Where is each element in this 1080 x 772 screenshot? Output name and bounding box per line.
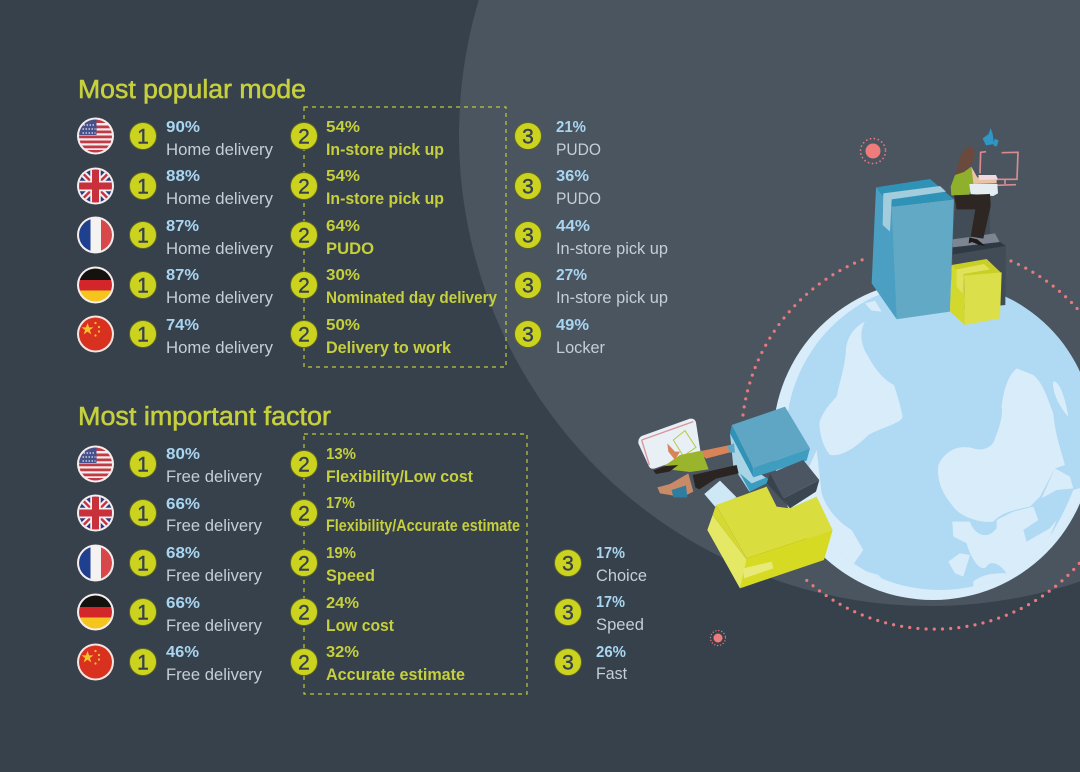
row: Germany: 17% — [596, 594, 625, 611]
row: UK — [77, 494, 520, 535]
row: Germany: 1 — [137, 274, 149, 298]
row: UK: 2 — [298, 502, 310, 526]
row: UK: 66% — [166, 496, 200, 513]
table: most important factor — [77, 446, 647, 684]
row: Germany: 2 — [298, 602, 310, 624]
dark stand box — [953, 200, 1006, 310]
row: UK: 17% — [326, 495, 355, 512]
icon: red location dot, upper — [860, 138, 886, 164]
row: USA: 2 — [298, 454, 310, 476]
row: Germany: 3 — [562, 602, 574, 624]
row: USA — [77, 446, 473, 486]
row: USA: 2 — [298, 126, 310, 148]
row: China: 2 — [298, 324, 310, 346]
row: USA: Home delivery — [166, 140, 273, 159]
row: USA: 1 — [137, 126, 149, 148]
row: Germany: Nominated day delivery — [326, 289, 498, 307]
row: China: 1 — [137, 324, 149, 346]
row: France: 64% — [326, 218, 360, 235]
row: Germany: 27% — [556, 267, 587, 284]
row: Germany: 1 — [137, 602, 149, 624]
light blue box — [704, 481, 737, 507]
trousers — [693, 465, 739, 489]
monitor — [980, 152, 1018, 185]
row: UK: PUDO — [556, 189, 601, 208]
row: Germany: 30% — [326, 267, 360, 284]
lower arm — [657, 473, 693, 497]
row: USA: Free delivery — [166, 467, 262, 486]
row: UK: In-store pick up — [326, 190, 444, 208]
row: Germany: Low cost — [326, 617, 394, 635]
row: Germany: 2 — [298, 274, 310, 298]
row: China: 1 — [137, 652, 149, 674]
row: UK: 2 — [298, 176, 310, 198]
row: UK: 1 — [137, 176, 149, 198]
row: China: 2 — [298, 652, 310, 674]
row: UK: 3 — [522, 176, 534, 198]
illustration: person lying with phone — [638, 419, 739, 497]
row: USA: 54% — [326, 119, 360, 136]
row: China: Fast — [596, 664, 627, 683]
row: UK — [77, 168, 601, 208]
row: France: 2 — [298, 224, 310, 248]
row: USA — [77, 118, 601, 159]
row: Germany: Free delivery — [166, 616, 262, 635]
row: UK: 54% — [326, 168, 360, 185]
shoes — [969, 237, 985, 246]
row: UK: Home delivery — [166, 189, 273, 208]
row: France: 3 — [522, 224, 534, 248]
hair — [653, 465, 678, 474]
row: France: 87% — [166, 218, 199, 235]
icon: red location dot, lower — [710, 630, 726, 646]
row: China: 3 — [522, 324, 534, 346]
torso — [663, 451, 709, 472]
row: UK: 1 — [137, 502, 149, 526]
row: France — [77, 544, 647, 585]
upper leg — [698, 445, 731, 459]
row: Germany: 3 — [522, 274, 534, 298]
row: USA: 80% — [166, 446, 200, 463]
row: France: 3 — [562, 552, 574, 576]
row: France: 44% — [556, 218, 590, 235]
row: France: In-store pick up — [556, 239, 668, 258]
dark small box — [767, 460, 819, 508]
row: USA: 13% — [326, 446, 356, 463]
row: France: Speed — [326, 567, 375, 585]
row: France: Home delivery — [166, 239, 273, 258]
row: France: 17% — [596, 545, 625, 562]
row: USA: 1 — [137, 454, 149, 476]
row: Germany — [77, 266, 668, 307]
laptop — [969, 184, 998, 196]
row: France — [77, 216, 668, 258]
blue box — [730, 407, 810, 492]
row: China: 32% — [326, 644, 359, 661]
row: China — [77, 316, 605, 357]
large background circle — [459, 0, 1080, 606]
heading: most popular mode: Most popular mode — [78, 76, 306, 104]
trousers — [954, 194, 991, 239]
phone — [638, 419, 701, 469]
torso — [951, 167, 973, 195]
row: China: Delivery to work — [326, 339, 452, 357]
dotted orbit around the globe — [743, 258, 1080, 629]
illustration: woman at a computer with thumbs-up icon — [951, 128, 1018, 246]
row: China: Free delivery — [166, 665, 262, 684]
dashed highlight box: most popular mode — [304, 107, 506, 367]
row: USA: 3 — [522, 126, 534, 148]
row: France: 19% — [326, 545, 356, 562]
row: USA: Flexibility/Low cost — [326, 468, 473, 486]
row: China: 74% — [166, 317, 199, 334]
row: USA: In-store pick up — [326, 141, 444, 159]
row: China: 3 — [562, 652, 574, 674]
row: France: PUDO — [326, 240, 374, 258]
blue box — [872, 179, 954, 319]
row: France: 1 — [137, 224, 149, 248]
heading: most important factor: Most important factor — [78, 403, 332, 431]
row: France: Free delivery — [166, 566, 262, 585]
row: Germany: 66% — [166, 595, 200, 612]
row: USA: PUDO — [556, 140, 601, 159]
row: China: Accurate estimate — [326, 666, 465, 684]
row: USA: 90% — [166, 119, 200, 136]
hair — [955, 146, 975, 175]
row: France: 68% — [166, 545, 200, 562]
row: Germany: In-store pick up — [556, 288, 668, 307]
row: Germany: Speed — [596, 615, 644, 634]
thumbs up icon — [983, 128, 999, 147]
illustration: tall blue box with dark box and yellow box — [872, 179, 1006, 325]
row: China: 26% — [596, 644, 626, 661]
row: Germany: 24% — [326, 595, 359, 612]
illustration: stacked boxes — [704, 407, 833, 588]
row: UK: Flexibility/Accurate estimate — [326, 517, 520, 535]
row: France: 1 — [137, 552, 149, 576]
row: China — [77, 644, 627, 684]
row: Germany — [77, 594, 644, 635]
shorts — [672, 485, 687, 497]
row: UK: 36% — [556, 168, 589, 185]
row: Germany: 87% — [166, 267, 199, 284]
yellow box — [707, 487, 833, 588]
row: UK: Free delivery — [166, 516, 262, 535]
globe — [773, 280, 1080, 613]
arm — [667, 443, 680, 460]
row: China: 50% — [326, 317, 360, 334]
yellow box — [950, 259, 1002, 325]
row: China: Locker — [556, 338, 605, 357]
arm — [971, 167, 997, 184]
dashed highlight box: most important factor — [304, 434, 527, 694]
row: China: 46% — [166, 644, 199, 661]
row: France: Choice — [596, 566, 647, 585]
row: USA: 21% — [556, 119, 586, 136]
row: China: Home delivery — [166, 338, 273, 357]
row: UK: 88% — [166, 168, 200, 185]
row: France: 2 — [298, 552, 310, 576]
table: most popular mode — [77, 118, 668, 357]
row: Germany: Home delivery — [166, 288, 273, 307]
row: China: 49% — [556, 317, 589, 334]
